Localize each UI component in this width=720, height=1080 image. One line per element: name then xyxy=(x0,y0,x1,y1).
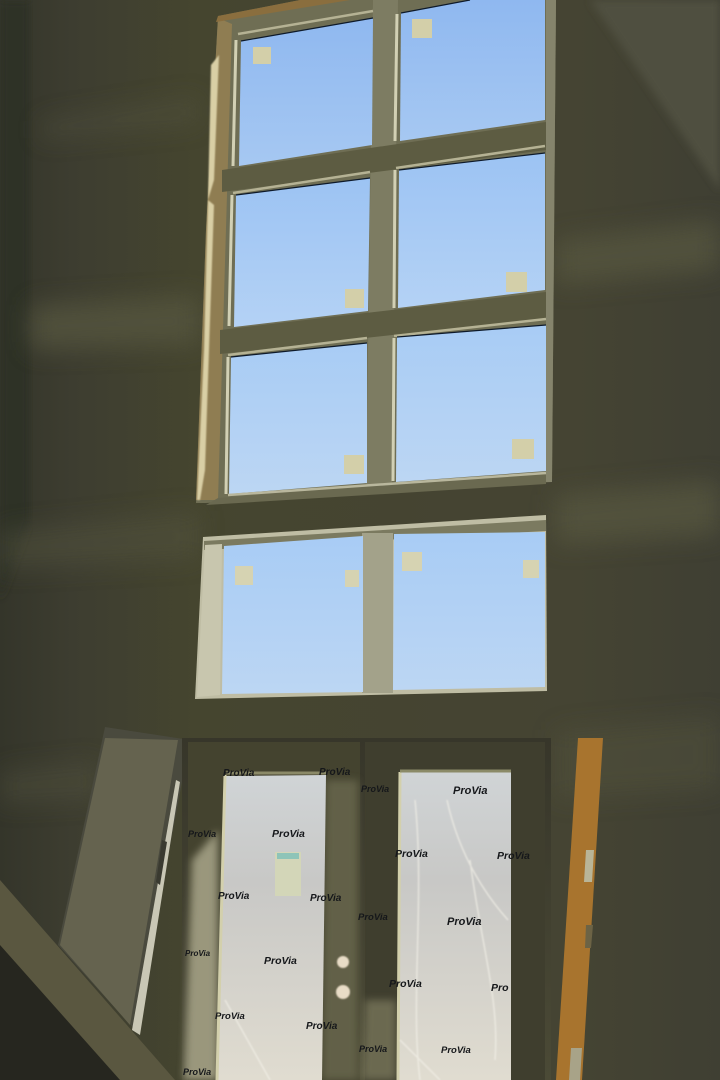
leaning panel xyxy=(58,727,190,1035)
ProVia film labels: ProVia xyxy=(272,828,305,840)
ProVia film labels: Pro xyxy=(491,982,509,994)
corner stickers xyxy=(253,19,534,474)
ProVia film labels: ProVia xyxy=(218,891,250,902)
ProVia film labels: ProVia xyxy=(319,767,351,778)
ProVia film labels: ProVia xyxy=(183,1067,211,1077)
ProVia film labels: ProVia xyxy=(441,1045,471,1056)
pane left xyxy=(222,536,363,694)
ProVia film labels: ProVia xyxy=(310,893,342,904)
sill highlights xyxy=(226,11,546,495)
door glass left xyxy=(218,775,326,1080)
ProVia film labels: ProVia xyxy=(395,848,428,860)
pane right xyxy=(393,532,545,690)
ProVia film labels: ProVia xyxy=(389,978,422,990)
ProVia film labels: ProVia xyxy=(361,784,389,794)
ProVia film labels: ProVia xyxy=(185,949,211,958)
stair rail xyxy=(0,880,175,1080)
plastic folds xyxy=(225,800,508,1080)
raw wood jamb xyxy=(196,18,232,500)
wood level xyxy=(556,738,603,1080)
ProVia film labels: ProVia xyxy=(264,955,297,967)
frame xyxy=(195,515,547,699)
ProVia film labels xyxy=(183,767,530,1077)
door panels xyxy=(182,738,551,1080)
sunlit jamb strip xyxy=(197,55,219,500)
ProVia film labels: ProVia xyxy=(358,912,388,923)
light frame strips xyxy=(217,771,511,1080)
window outer frame xyxy=(196,0,556,503)
stickers xyxy=(235,552,539,587)
pane glass middle-left xyxy=(234,178,370,327)
level body xyxy=(556,738,603,1080)
lower window xyxy=(195,515,547,699)
ProVia film labels: ProVia xyxy=(453,785,487,797)
pane glass bottom-left xyxy=(229,343,367,494)
sticker on glass xyxy=(275,852,301,896)
ProVia film labels: ProVia xyxy=(188,829,216,839)
horizontal rails xyxy=(222,122,546,192)
right frame edge xyxy=(546,0,556,482)
pane glass middle-right xyxy=(398,153,545,308)
door knobs xyxy=(336,956,350,999)
door glass right xyxy=(398,772,511,1080)
ProVia film labels: ProVia xyxy=(223,768,255,779)
ProVia film labels: ProVia xyxy=(447,916,481,928)
pane glass top-right xyxy=(400,0,545,141)
ProVia film labels: ProVia xyxy=(306,1021,338,1032)
plastic wrap light xyxy=(184,780,396,1080)
ProVia film labels: ProVia xyxy=(359,1044,387,1054)
upper window xyxy=(196,0,556,505)
ProVia film labels: ProVia xyxy=(497,850,530,862)
central mullion xyxy=(366,0,398,490)
pane glass top-left xyxy=(239,18,373,166)
pane glass bottom-right xyxy=(396,325,546,482)
french door xyxy=(182,738,551,1080)
ProVia film labels: ProVia xyxy=(215,1011,245,1022)
